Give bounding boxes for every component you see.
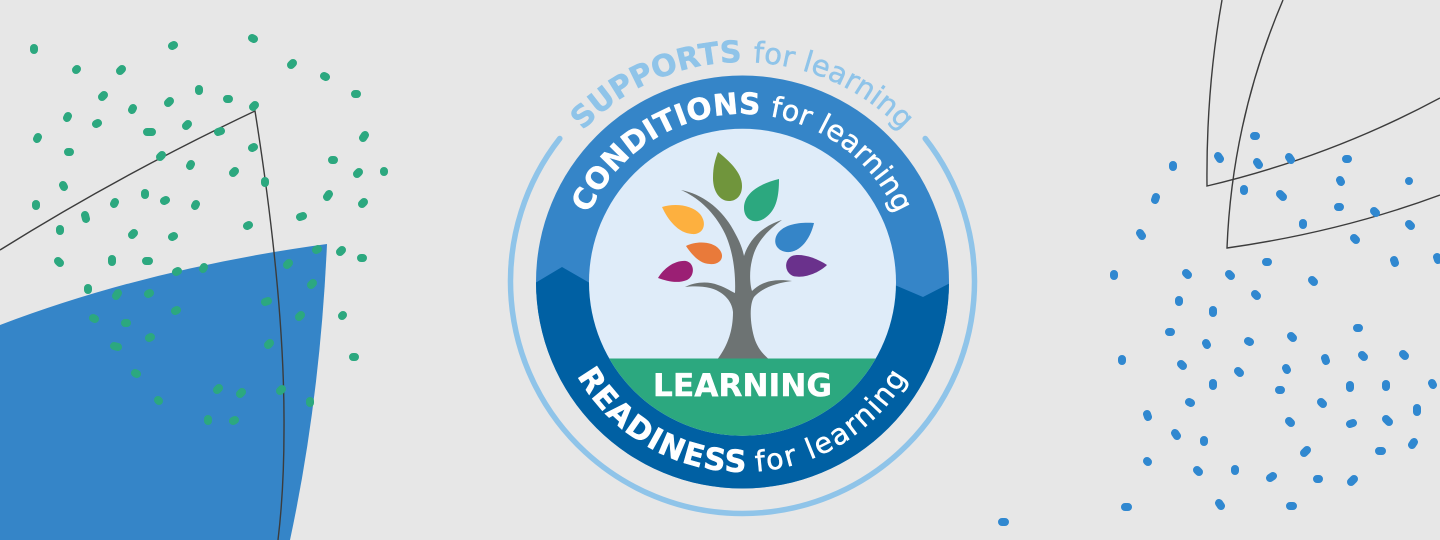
magenta leaf [658, 261, 693, 282]
conditions band [536, 76, 949, 488]
readiness subheading: for learning [754, 370, 908, 472]
conditions heading: CONDITIONS [573, 92, 758, 210]
outer support ring [510, 138, 975, 513]
tree [658, 152, 827, 358]
ground [610, 358, 876, 436]
outline shapes, right [1207, 0, 1440, 248]
inner sky circle [589, 129, 896, 436]
supports subheading: for learning [754, 40, 912, 131]
blue leaf scatter, right [1002, 136, 1438, 522]
readiness band [530, 267, 956, 500]
olive leaf [713, 152, 742, 201]
learning label: LEARNING [653, 368, 832, 404]
outline shape, left [0, 111, 284, 540]
blue leaf [775, 223, 814, 252]
readiness heading: READINESS [578, 366, 744, 472]
yellow leaf [662, 205, 704, 234]
orange leaf [686, 243, 722, 264]
supports heading: SUPPORTS [571, 40, 740, 128]
badge [508, 40, 978, 516]
tree trunk and branches [681, 190, 792, 358]
green leaf [744, 179, 779, 221]
conditions subheading: for learning [772, 96, 910, 212]
green leaf scatter, left [34, 38, 384, 421]
blue curved shape, left [0, 244, 327, 540]
purple leaf [786, 255, 827, 277]
